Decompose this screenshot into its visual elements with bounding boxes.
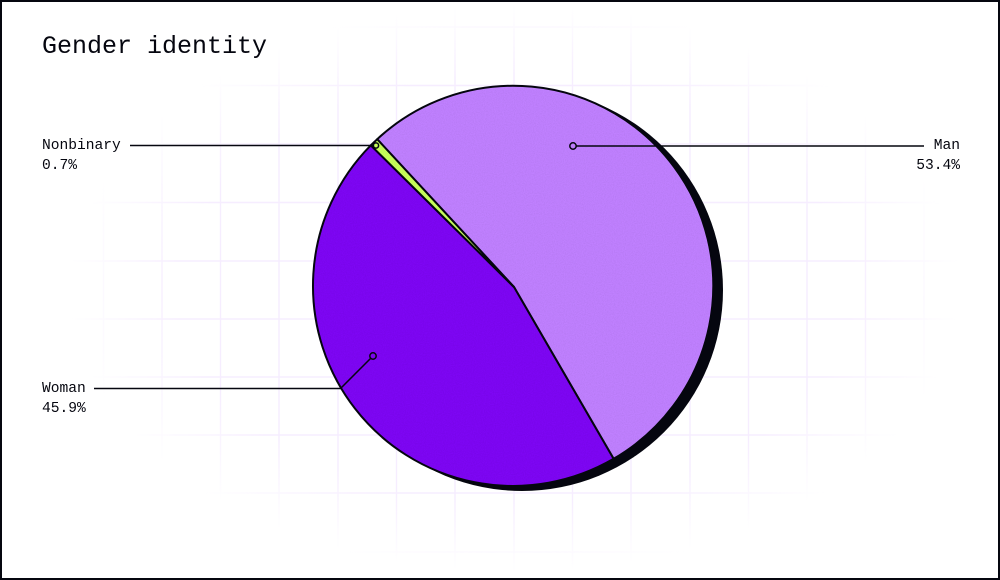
marker: Man xyxy=(570,143,576,149)
pie shadow xyxy=(321,89,723,491)
label: Nonbinary: Nonbinary xyxy=(42,138,121,154)
title: Gender identity xyxy=(42,32,267,61)
callout: Woman xyxy=(42,353,376,417)
slice: Woman 45.9% xyxy=(313,145,614,486)
label: Man: Man xyxy=(934,138,960,154)
value: Man: 53.4% xyxy=(916,158,960,174)
value: Nonbinary: 0.7% xyxy=(42,158,77,174)
slice: Nonbinary 0.7% xyxy=(371,139,514,287)
pie texture xyxy=(314,88,712,484)
pie chart xyxy=(313,86,723,491)
leader line: Man xyxy=(576,145,924,147)
marker: Woman xyxy=(370,353,376,359)
callout: Nonbinary xyxy=(42,138,379,174)
marker: Nonbinary xyxy=(373,143,379,148)
slice: Man 53.4% xyxy=(377,86,713,459)
leader line: Woman xyxy=(94,358,371,388)
leader line: Nonbinary xyxy=(130,144,373,146)
value: Woman: 45.9% xyxy=(42,401,86,417)
label: Woman: Woman xyxy=(42,381,86,397)
callout: Man xyxy=(570,138,960,174)
